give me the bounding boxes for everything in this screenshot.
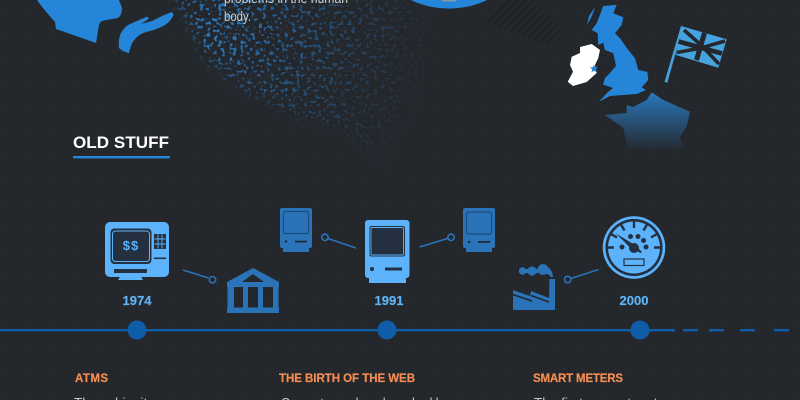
icon: small computer left — [280, 208, 312, 252]
map: France fading — [605, 92, 690, 152]
icon: ATM: $$ — [123, 238, 139, 253]
icon: union jack flag — [664, 26, 727, 83]
connector: factory to gauge — [564, 270, 598, 283]
heading: old stuff: OLD STUFF — [73, 133, 169, 152]
hatched long shadow — [486, 0, 561, 44]
particle spray — [169, 0, 426, 160]
map: Ireland with star — [568, 44, 600, 86]
entry: smart meters — [533, 373, 665, 400]
year labels: 1974 — [123, 293, 152, 308]
entry: birth of the web: THE BIRTH OF THE WEB — [279, 373, 415, 385]
connector: right of large computer — [420, 234, 454, 247]
entry: birth of the web — [279, 373, 463, 400]
year labels — [123, 293, 648, 308]
year labels: 1991 — [375, 293, 403, 308]
entry: ATMs — [74, 373, 202, 400]
entry: ATMs: ATMS — [75, 373, 108, 385]
icon: ATM — [105, 222, 169, 280]
icon: large computer — [365, 220, 410, 283]
blue circle — [359, 0, 539, 9]
entry: smart meters: SMART METERS — [533, 373, 623, 385]
icon: small computer right — [463, 208, 495, 252]
icon: open hand — [119, 12, 173, 53]
text block: intro fragment — [224, 0, 348, 24]
text block: intro fragment: body. — [224, 9, 251, 24]
year labels: 2000 — [620, 293, 648, 308]
map: Great Britain — [587, 5, 648, 102]
icon: head silhouette — [37, 0, 122, 43]
connector: left computer — [322, 234, 356, 248]
connector: ATM to bank — [183, 270, 216, 283]
icon: factory — [513, 264, 555, 310]
timeline — [0, 320, 789, 340]
icon: bank — [227, 268, 279, 313]
icon: smart meter gauge — [603, 216, 665, 279]
